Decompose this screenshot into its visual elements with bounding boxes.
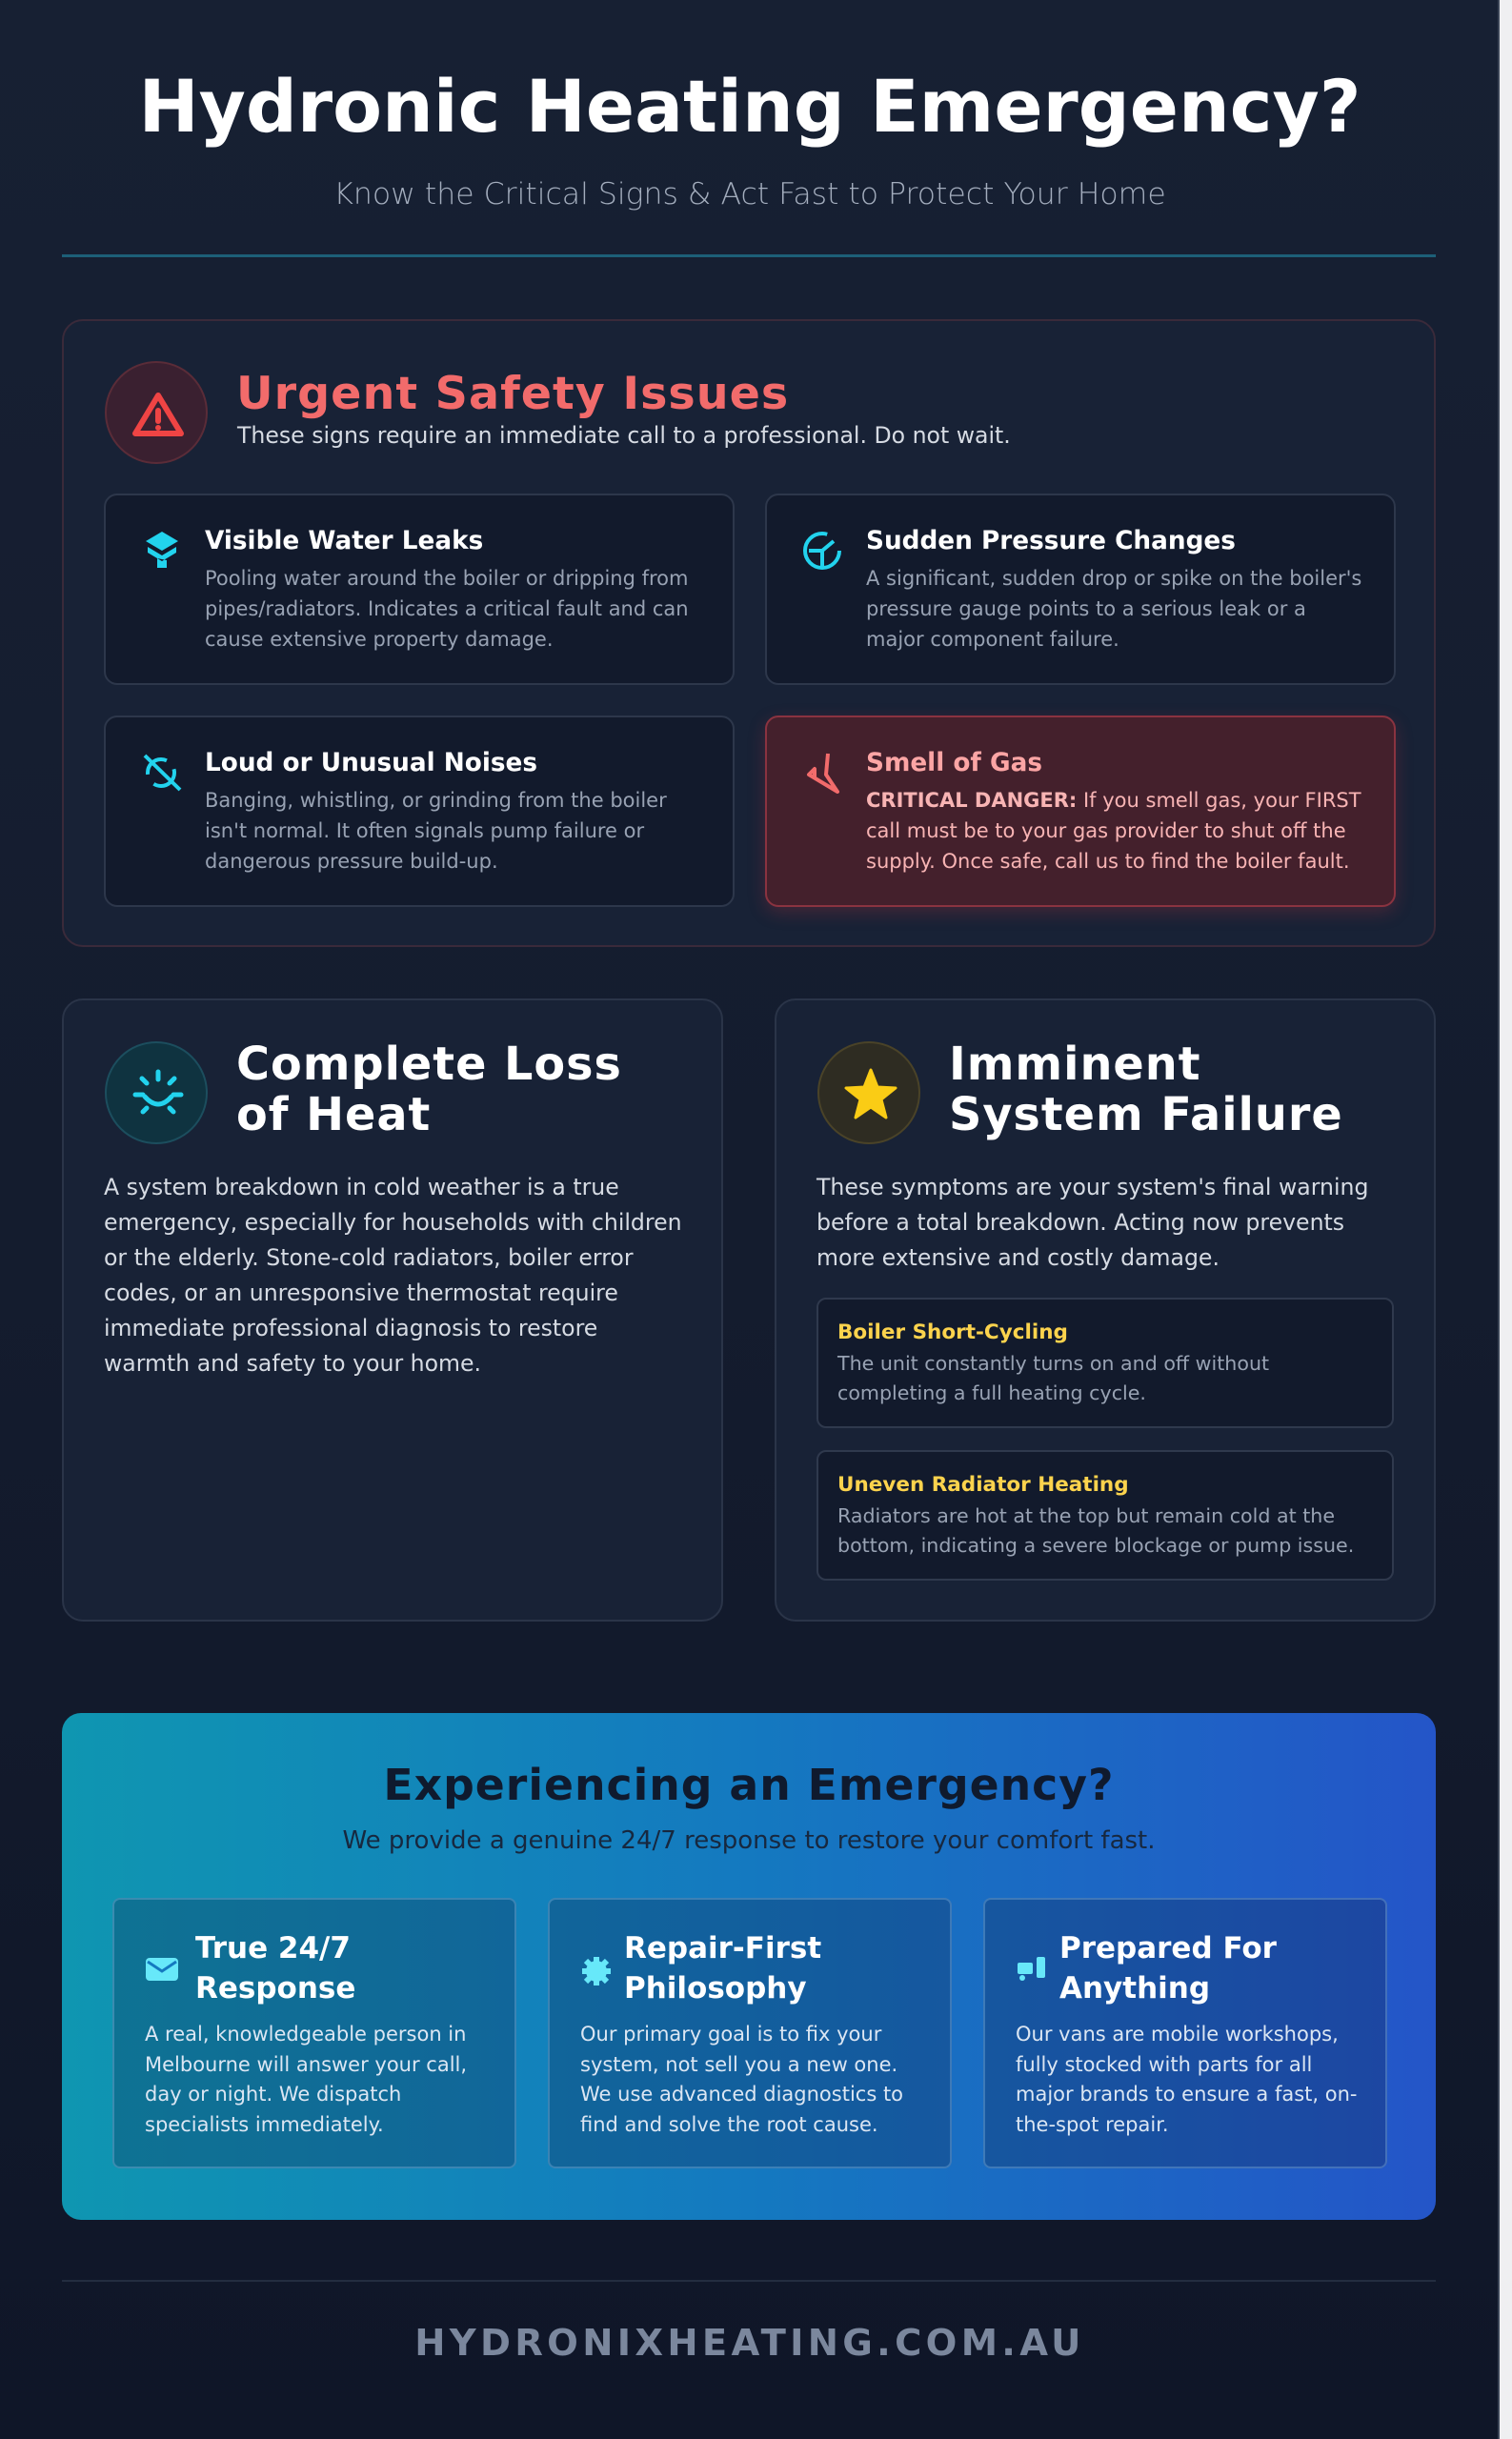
footer: website: HYDRONIXHEATING.COM.AU (414, 2322, 1085, 2365)
heading: Experiencing an Emergency? (383, 1760, 1115, 1810)
subcard: short-cycling: Boiler Short-Cycling (837, 1320, 1068, 1344)
icon: muted sound (143, 755, 181, 791)
card: pressure: major component failure. (866, 628, 1119, 651)
subheading: We provide a genuine 24/7 response to restore your comfort fast. (342, 1826, 1156, 1855)
card: noises (104, 716, 735, 907)
subcard: uneven heating (816, 1450, 1394, 1581)
card: true 24/7: True 24/7 (195, 1931, 351, 1965)
heading (236, 1038, 622, 1141)
heading: of Heat (236, 1089, 431, 1141)
card: true 24/7: Response (195, 1971, 355, 2006)
icon: sun (105, 1041, 208, 1144)
card: gas: Smell of Gas (866, 749, 1042, 777)
text: A system breakdown in cold weather is a true emergency, especially for households with children or the elderly. Stone-cold radiators, boiler error codes, or an unresponsive thermostat require immediate professional diagnosis to restore warmth and safety to your home. (104, 1174, 682, 1377)
subcard: short-cycling: The unit constantly turns on and off without completing a full heating cycle. (837, 1352, 1269, 1404)
card: repair-first: Philosophy (624, 1971, 807, 2006)
icon: envelope (146, 1958, 178, 1981)
card: pressure: pressure gauge points to a serious leak or a (866, 597, 1306, 620)
card: prepared: Prepared For (1059, 1931, 1277, 1965)
subcard: uneven heating: Radiators are hot at the top but remain cold at the bottom, indicating a severe blockage or pump issue. (837, 1504, 1354, 1557)
card: true 24/7: A real, knowledgeable person in Melbourne will answer your call, day or night. We dispatch specialists immediately. (145, 2023, 467, 2136)
card: prepared (983, 1898, 1387, 2168)
card: prepared: Our vans are mobile workshops, fully stocked with parts for all major brands to ensure a fast, on-the-spot repair. (1016, 2023, 1357, 2136)
panel: call to action (62, 1713, 1436, 2220)
heading: Complete Loss (236, 1038, 622, 1091)
icon: warning triangle (105, 361, 208, 464)
icon: gauge (803, 532, 841, 570)
card: gas: CRITICAL DANGER: If you smell gas, your FIRST call must be to your gas provider to shut off the supply. Once safe, call us to find the boiler fault. (866, 789, 1361, 873)
panel: complete loss of heat (62, 998, 723, 1622)
text: These symptoms are your system's final warning before a total breakdown. Acting now prevents more extensive and costly damage. (816, 1174, 1368, 1271)
card: true 24/7 (112, 1898, 516, 2168)
icon: water (146, 532, 178, 568)
heading (949, 1038, 1343, 1141)
icon: star (817, 1041, 920, 1144)
card: noises: Loud or Unusual Noises (205, 749, 537, 777)
card: repair-first: Our primary goal is to fix your system, not sell you a new one. We use advanced diagnostics to find and solve the root cause. (580, 2023, 903, 2136)
card: prepared: Anything (1059, 1971, 1210, 2006)
heading: Urgent Safety Issues (236, 368, 789, 420)
card: repair-first (548, 1898, 952, 2168)
icon: van (1018, 1957, 1045, 1981)
card: water leaks: Pooling water around the boiler or dripping from pipes/radiators. Indicates a critical fault and can cause extensive property damage. (205, 567, 689, 651)
card: pressure: Sudden Pressure Changes (866, 527, 1236, 555)
subcard: short-cycling (816, 1298, 1394, 1428)
heading: Imminent (949, 1038, 1201, 1091)
card: water leaks: Visible Water Leaks (205, 527, 483, 555)
subcard: uneven heating: Uneven Radiator Heating (837, 1473, 1129, 1497)
card: water leaks (104, 494, 735, 685)
icon: gas flame (806, 753, 840, 794)
card: pressure: A significant, sudden drop or spike on the boiler's (866, 567, 1361, 590)
card: noises: Banging, whistling, or grinding from the boiler isn't normal. It often signals pump failure or dangerous pressure build-up. (205, 789, 667, 873)
heading: System Failure (949, 1089, 1343, 1141)
card: repair-first: Repair-First (624, 1931, 821, 1965)
card: gas (765, 716, 1396, 907)
panel: urgent safety issues (62, 319, 1436, 947)
text: intro: These signs require an immediate call to a professional. Do not wait. (237, 422, 1011, 449)
title: Hydronic Heating Emergency? (138, 65, 1361, 149)
card: pressure (765, 494, 1396, 685)
icon: gear (582, 1957, 611, 1985)
panel: imminent system failure (775, 998, 1436, 1622)
subtitle: Know the Critical Signs & Act Fast to Protect Your Home (333, 177, 1166, 212)
